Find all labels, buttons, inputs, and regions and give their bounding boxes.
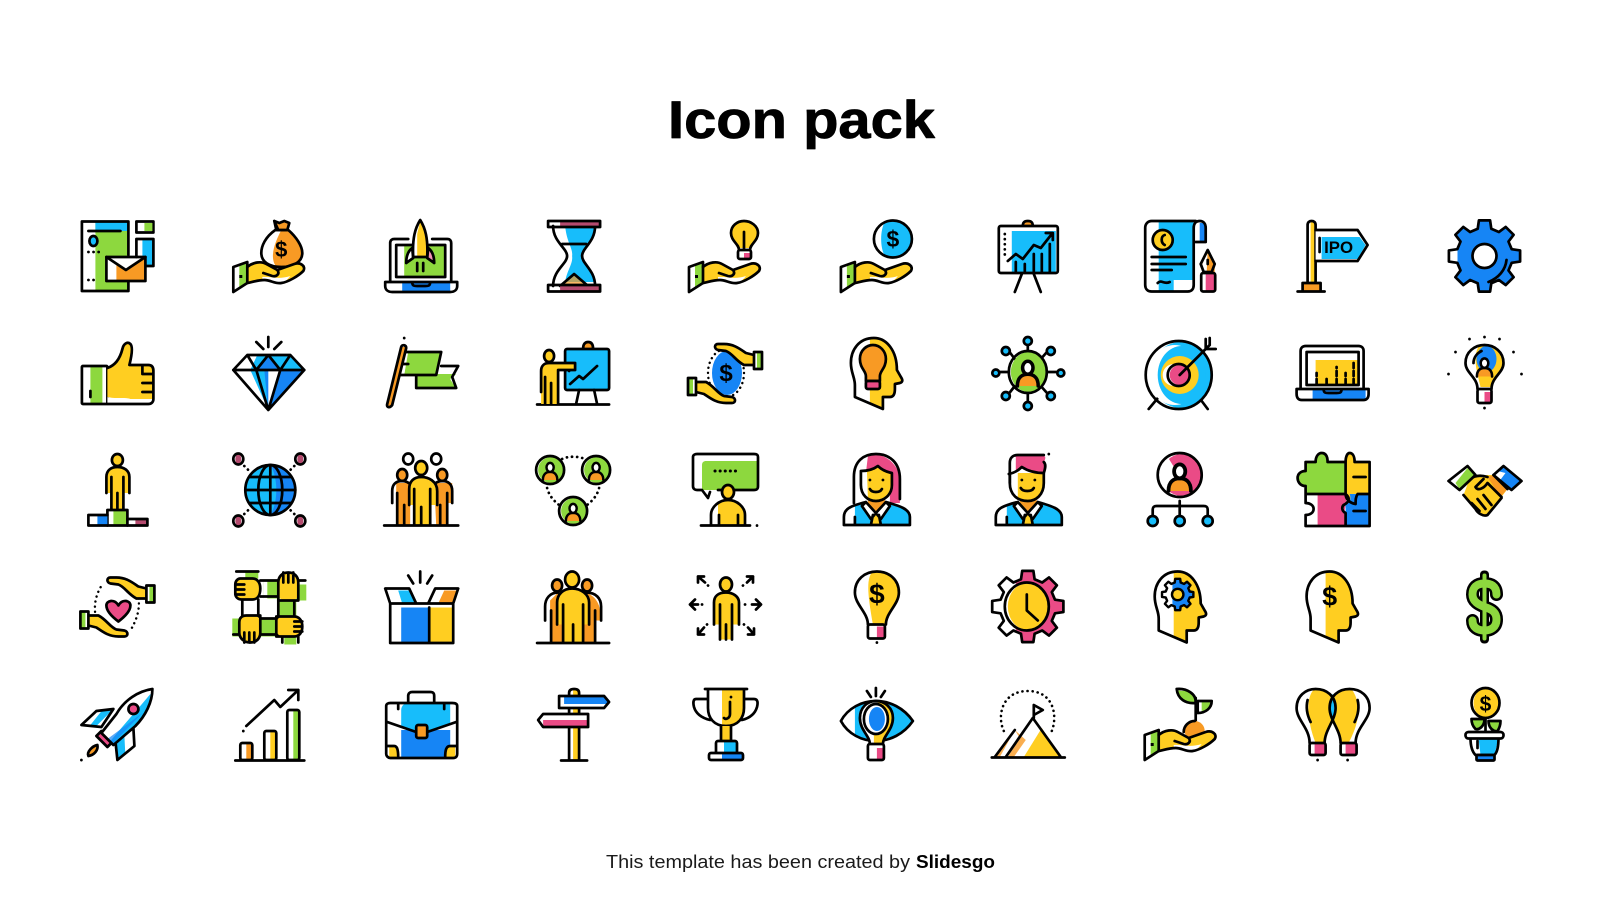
- icon: lightbulb with person: [1448, 337, 1522, 410]
- icon: lightbulb with dollar: [855, 572, 899, 644]
- icon: person on podium: [88, 454, 147, 526]
- icon: coin on hand: [841, 220, 912, 292]
- icon: money plant: $: [1480, 693, 1492, 716]
- icon: gear: [1449, 220, 1520, 292]
- icon: target with arrow: [1146, 338, 1216, 409]
- icon: trophy: [693, 689, 758, 760]
- icon: head with gear: [1155, 572, 1206, 642]
- icon: globe: [233, 454, 305, 526]
- icon: laptop with bar chart: [1297, 346, 1369, 400]
- icon: money bag on hand: [233, 221, 304, 292]
- icon: IPO signpost: [1298, 221, 1368, 292]
- icon: lightbulb on hand: [689, 221, 760, 292]
- footer credit: This template has been created by: [606, 852, 910, 872]
- icon: connected people: [536, 456, 610, 525]
- title: Icon pack: [668, 91, 936, 150]
- icon: puzzle: [1298, 453, 1370, 526]
- icon: eye with lightbulb: [840, 688, 913, 760]
- icon: document and mail: [82, 221, 153, 291]
- icon: open box: [385, 572, 458, 644]
- icon: businessman: [996, 454, 1062, 525]
- icon: group of people: [384, 454, 458, 526]
- infographic canvas: [79, 99, 1523, 872]
- icon: signpost: [538, 689, 609, 760]
- icon: rocket: [81, 689, 152, 761]
- icon: flag: [387, 338, 458, 407]
- icon: head with lightbulb: [851, 338, 902, 409]
- icon: diamond: [233, 337, 304, 410]
- icon: growth bar chart: [235, 690, 304, 760]
- icon: head with dollar: [1307, 572, 1358, 642]
- icon: money plant: [1466, 688, 1504, 761]
- icon: speech bubble and person: [693, 454, 758, 526]
- icon: twin lightbulbs: [1297, 689, 1370, 761]
- icon: hands holding heart: [80, 578, 154, 636]
- icon: mountain with flag: [992, 691, 1065, 758]
- icon: person network: [992, 337, 1064, 410]
- icon: money bag on hand: $: [275, 237, 287, 262]
- icon: hands exchanging money: $: [719, 360, 733, 387]
- icon: handshake: [1448, 466, 1522, 516]
- icon: team of three: [537, 572, 609, 643]
- icon: rocket launching from laptop: [385, 220, 457, 292]
- icon: thumbs up: [81, 343, 153, 404]
- icon: businesswoman: [844, 454, 910, 525]
- icon: four interlocking hands: [232, 572, 306, 644]
- icon: contract with fountain pen: [1145, 221, 1216, 292]
- icon: person with directional arrows: [690, 576, 761, 640]
- icon: head with dollar: $: [1322, 582, 1337, 612]
- icon: IPO signpost: IPO: [1324, 238, 1353, 257]
- icon: lightbulb with dollar: $: [869, 578, 885, 610]
- icon: presentation board with chart: [999, 221, 1058, 292]
- icon: dollar sign: [1472, 570, 1496, 644]
- icon: hourglass: [548, 221, 600, 292]
- icon: presenter at board: [537, 342, 609, 404]
- icon: hands exchanging money: [688, 344, 762, 403]
- icon: coin on hand: $: [887, 226, 900, 252]
- icon: organisation chart: [1148, 453, 1213, 526]
- footer credit: Slidesgo: [916, 852, 995, 872]
- icon: gear with clock: [992, 571, 1063, 642]
- icon: briefcase: [386, 692, 457, 758]
- icon: seedling on hand: [1145, 689, 1215, 760]
